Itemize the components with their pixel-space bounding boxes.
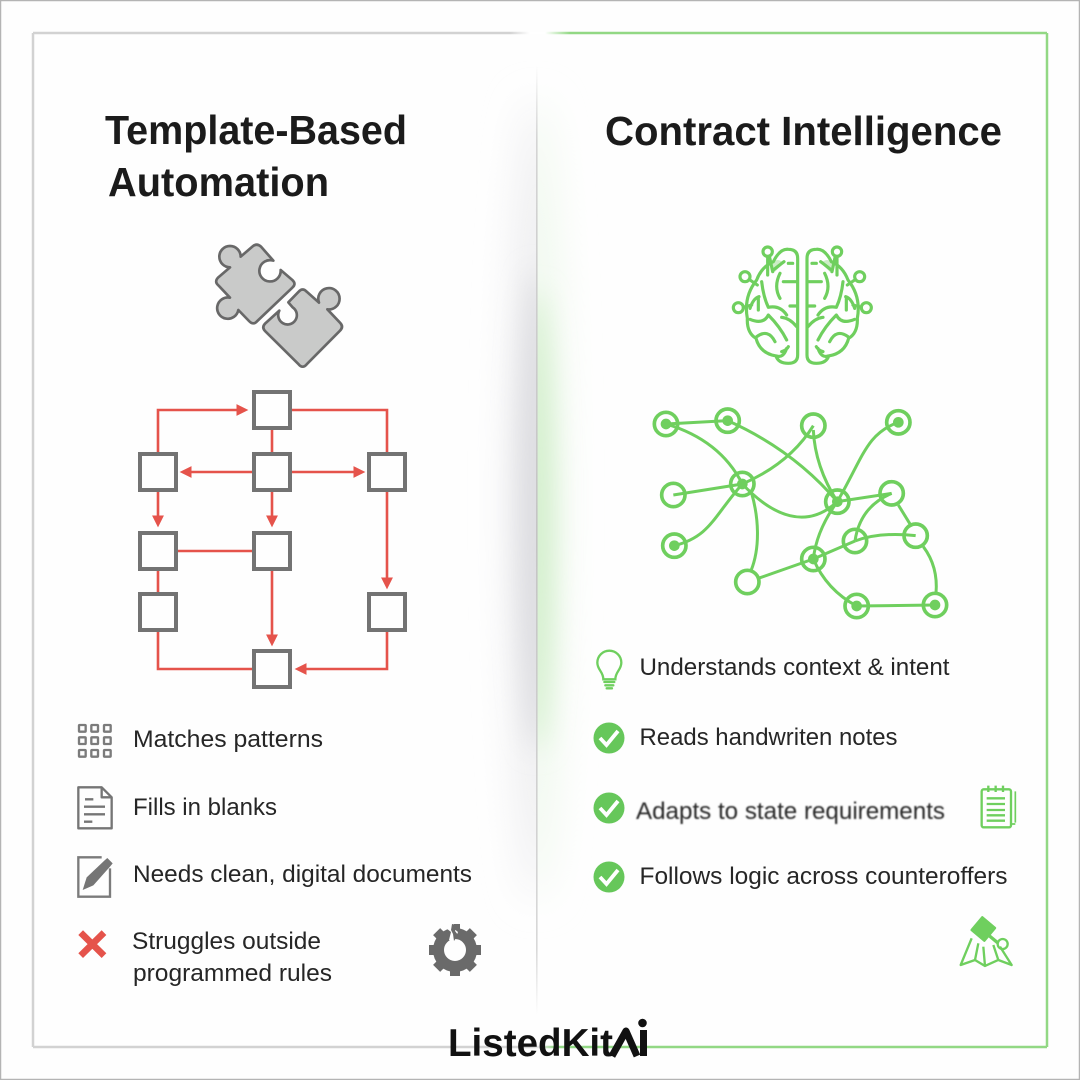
list: contract intelligence strengths [594,651,1015,966]
list: template limitations [78,725,481,987]
text: struggles outside programmed rules: Struggles outside [132,928,321,955]
text: struggles outside programmed rules [132,928,332,987]
icon: pencil on page [78,857,113,897]
diagram: neural network of connected nodes [654,409,947,618]
icon: gavel on map [961,917,1012,966]
network links [666,421,936,606]
text: reads handwriten notes: Reads handwriten notes [640,724,898,751]
red flow arrows [158,410,387,669]
text: needs clean digital documents: Needs clean, digital documents [133,861,472,888]
text: follows logic across counteroffers: Follows logic across counteroffers [640,863,1008,890]
heading: template-based automation: Automation [108,159,329,205]
grey flow boxes [140,392,405,687]
heading: template-based automation [105,107,407,205]
icon: brain [733,247,871,363]
text: adapts to state requirements: Adapts to state requirements [636,798,945,825]
text: matches patterns: Matches patterns [133,726,323,753]
icon: pattern grid [79,725,111,757]
icon: check [594,862,624,892]
icon: puzzle pieces [216,245,342,367]
text: understands context and intent: Understands context & intent [640,654,950,681]
logo: ListedKit AI: ListedKit [448,1022,613,1065]
heading: contract intelligence: Contract Intelligence [605,108,1002,154]
icon: check [594,722,624,754]
icon: document [78,787,112,828]
heading: template-based automation: Template-Based [105,107,407,153]
network nodes [654,409,947,618]
icon: red cross [81,933,104,956]
icon: notepad [982,786,1015,827]
icon: light bulb [597,651,621,688]
icon: check [594,792,624,824]
panel: contract intelligence [594,108,1015,966]
icon: broken gear [429,920,481,976]
center divider with grey and green glow [511,65,563,1015]
text: fills in blanks: Fills in blanks [133,794,277,821]
flowchart: rigid template flow [140,392,405,687]
panel: template-based automation [78,107,481,987]
text: struggles outside programmed rules: programmed rules [133,960,332,987]
